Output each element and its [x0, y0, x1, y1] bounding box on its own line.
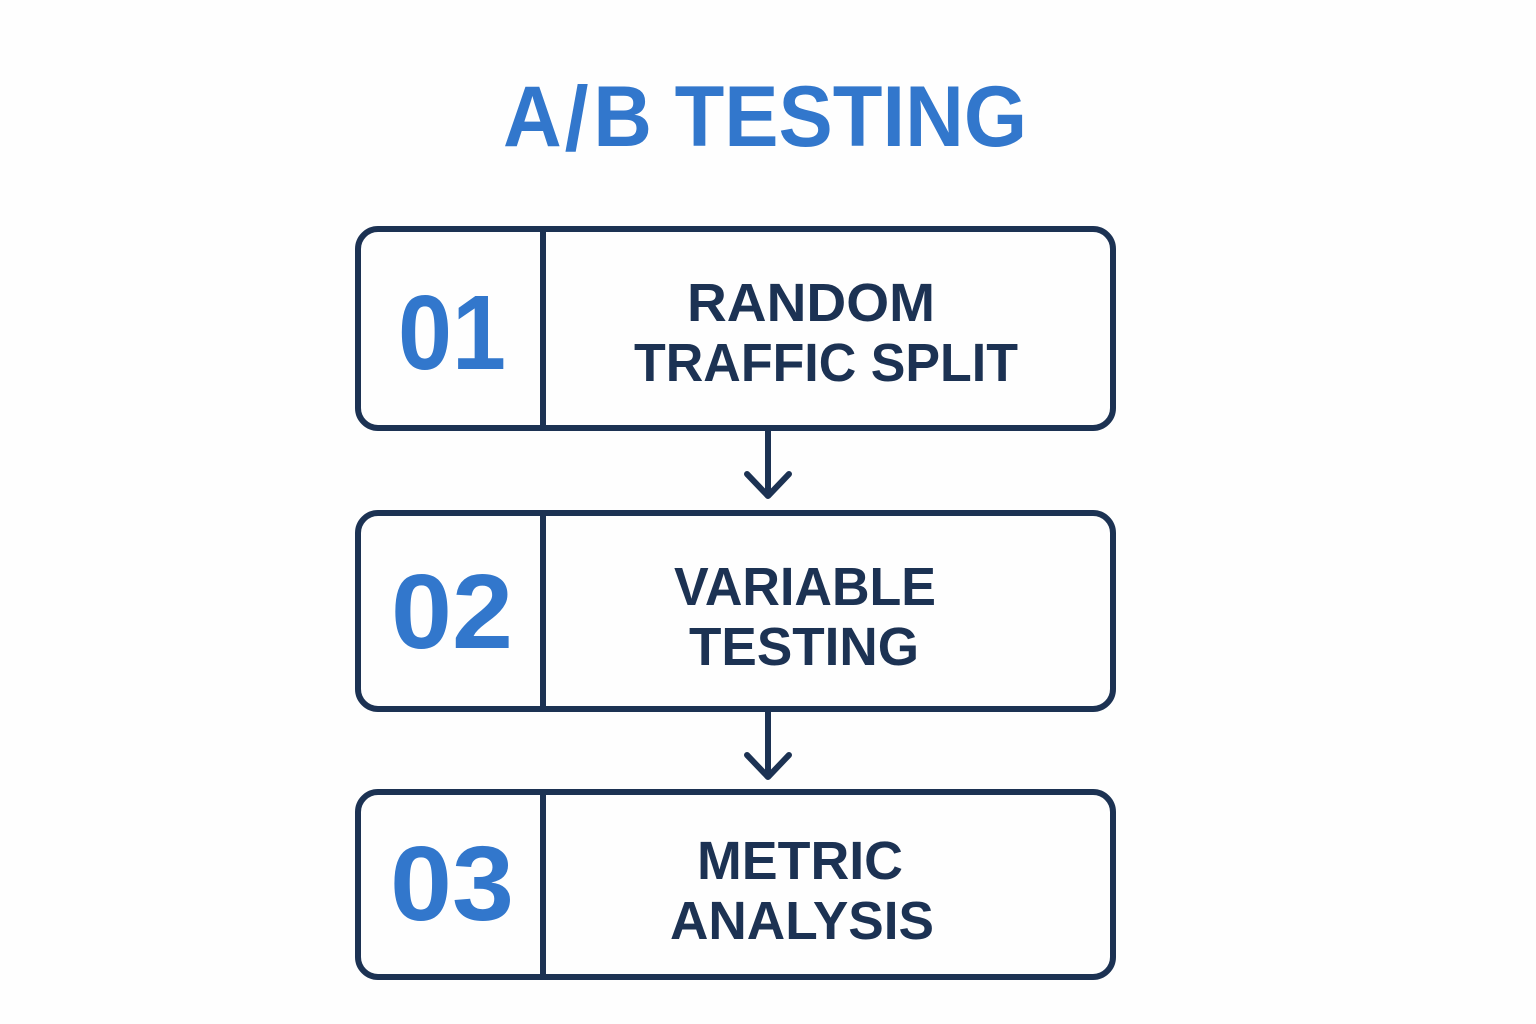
step number 03: 03 — [390, 825, 514, 943]
step label: random traffic split: TRAFFIC SPLIT — [634, 333, 1018, 393]
step label: variable testing — [674, 557, 936, 677]
step label: variable testing: TESTING — [689, 617, 919, 677]
step label: random traffic split — [634, 273, 1018, 393]
step label: metric analysis — [670, 831, 934, 951]
step label: variable testing: VARIABLE — [674, 557, 936, 617]
step label: metric analysis: METRIC — [697, 831, 903, 891]
panel: step 2 — [358, 513, 1113, 709]
arrow: step 1 to step 2 — [747, 430, 789, 496]
panel: step 3 — [358, 792, 1113, 977]
step number 02: 02 — [391, 553, 513, 671]
step label: metric analysis: ANALYSIS — [670, 891, 934, 951]
arrow: step 2 to step 3 — [747, 711, 789, 777]
title: B TESTING — [593, 68, 1027, 164]
title: / — [565, 68, 589, 170]
panel: step 1 — [358, 229, 1113, 428]
title: A — [503, 68, 562, 164]
step number 01: 01 — [398, 274, 506, 392]
step label: random traffic split: RANDOM — [687, 273, 935, 333]
